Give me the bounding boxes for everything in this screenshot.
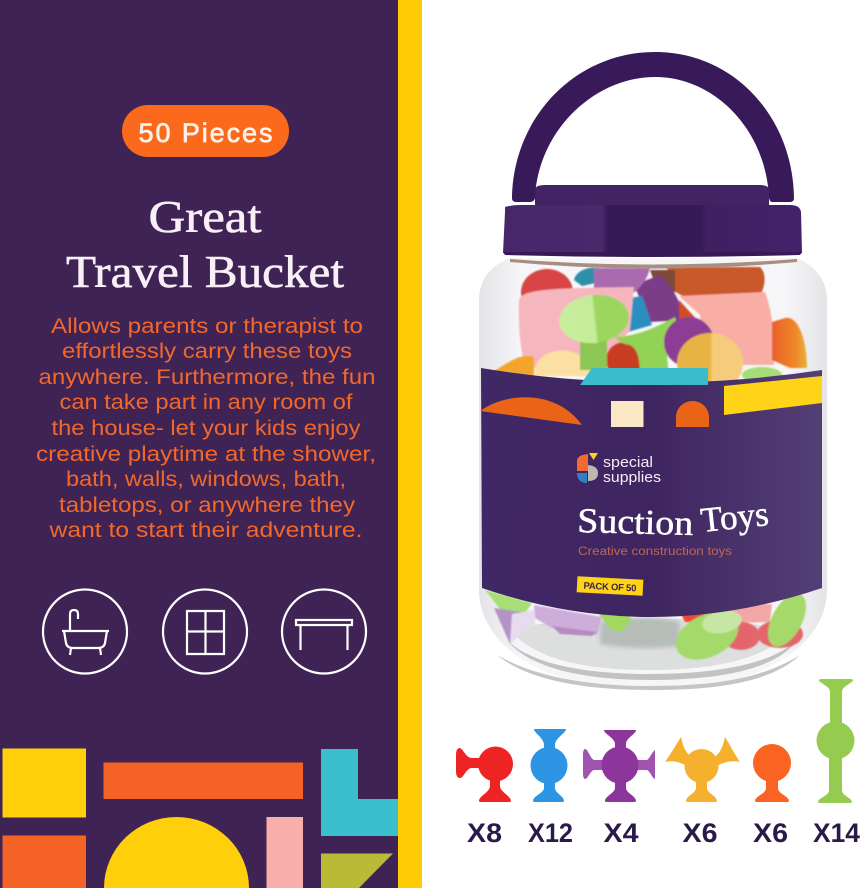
toy: red — [456, 746, 513, 802]
decorative colour blocks — [2, 748, 398, 888]
icon: table — [282, 590, 366, 674]
text block: description: effortlessly carry these toys — [62, 340, 352, 363]
toy: green — [816, 679, 854, 803]
toy counts: X6 — [753, 818, 788, 848]
label decorative shapes — [480, 368, 822, 427]
text block: description: bath, walls, windows, bath, — [66, 468, 346, 491]
heading: Great Travel Bucket: Travel Bucket — [66, 247, 345, 297]
toy counts: X6 — [682, 818, 718, 848]
label title: Suction Toys: Toys — [699, 494, 770, 540]
toy: blue — [530, 729, 568, 802]
text block: description: can take part in any room of — [60, 391, 353, 414]
toy: purple — [583, 730, 655, 802]
logo: special supplies — [577, 453, 661, 486]
jar handle — [512, 52, 794, 202]
text block: description: want to start their adventure. — [48, 519, 363, 542]
jar neck rim — [510, 259, 797, 268]
toy counts: X14 — [813, 818, 860, 848]
label tag: Pack of 50: PACK OF 50 — [583, 581, 637, 594]
toy: yellow — [665, 737, 740, 802]
text block: description — [36, 315, 376, 542]
heading: Great Travel Bucket: Great — [148, 192, 262, 242]
jar lid — [503, 185, 802, 257]
label tag: Pack of 50 — [577, 576, 643, 596]
yellow vertical stripe — [398, 0, 422, 888]
toy counts: X12 — [528, 818, 573, 848]
heading: Great Travel Bucket — [66, 192, 345, 297]
text block: description: Allows parents or therapist to — [51, 315, 363, 338]
label subtitle: Creative construction toys — [578, 546, 732, 558]
toy: orange — [753, 744, 791, 802]
logo: special supplies: supplies — [603, 469, 661, 486]
toy counts — [467, 818, 860, 848]
panel: purple left column — [0, 0, 398, 888]
jar body — [479, 258, 827, 690]
icon: window — [163, 590, 247, 674]
toys inside jar — [485, 267, 814, 669]
icon: bathtub — [43, 590, 127, 674]
label title: Suction Toys — [577, 494, 770, 543]
badge: 50 Pieces — [122, 105, 289, 157]
text block: description: creative playtime at the shower, — [36, 443, 376, 466]
text block: description: anywhere. Furthermore, the fun — [38, 366, 376, 389]
text block: description: the house- let your kids enjoy — [52, 417, 361, 440]
toy counts: X4 — [604, 818, 638, 848]
product label — [481, 368, 822, 617]
toy counts: X8 — [467, 818, 502, 848]
text block: description: tabletops, or anywhere they — [59, 494, 356, 517]
badge: 50 Pieces: 50 Pieces — [138, 118, 272, 148]
label title: Suction Toys: Suction — [577, 501, 694, 543]
logo: special supplies: special — [603, 454, 653, 471]
